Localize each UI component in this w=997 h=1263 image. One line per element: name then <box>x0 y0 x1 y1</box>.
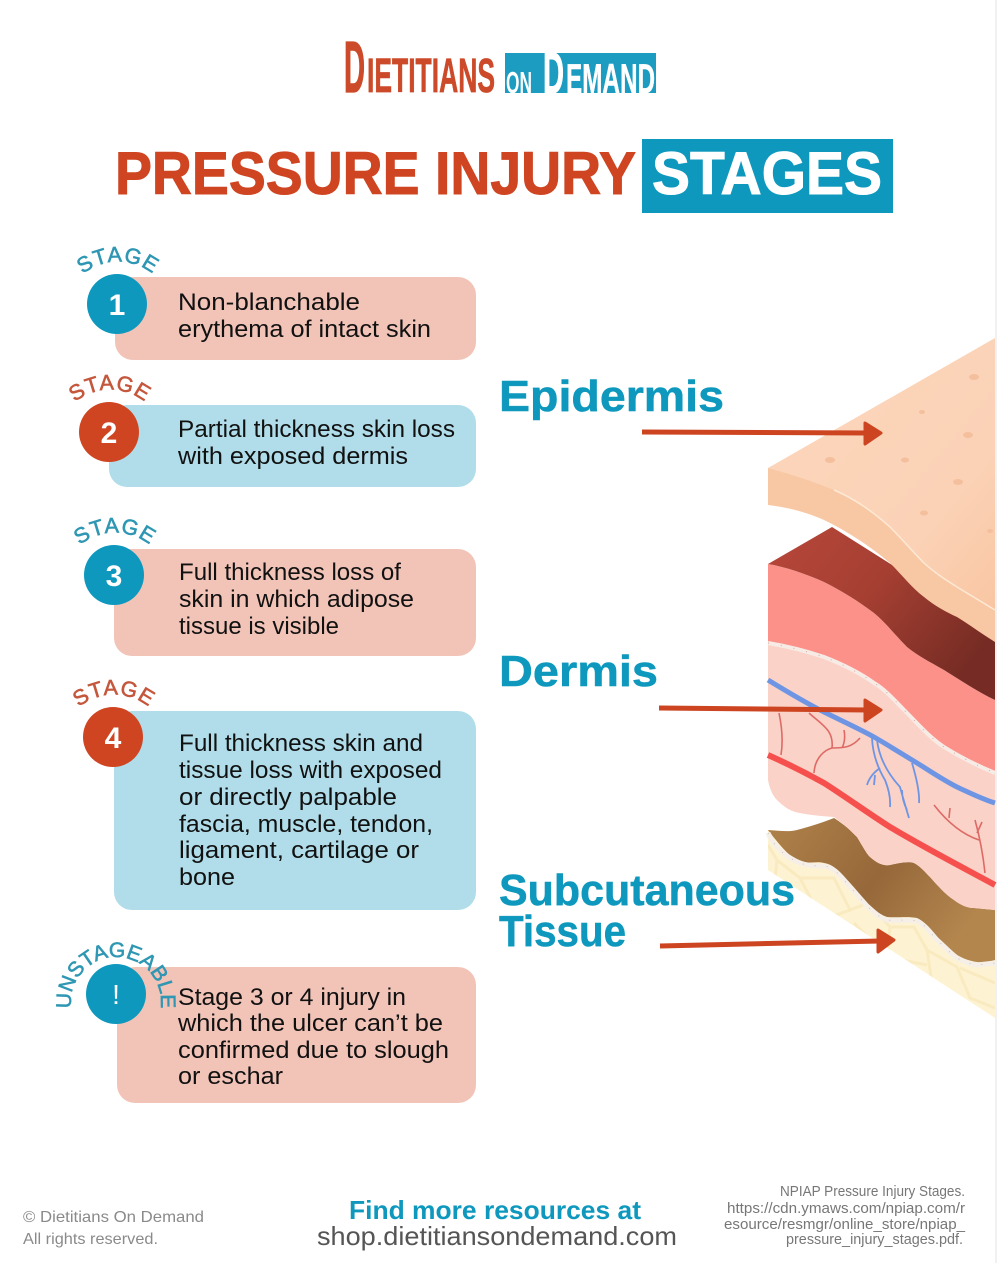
arrow: to subcutaneous tissue <box>660 930 894 952</box>
arrow: to epidermis <box>642 423 881 444</box>
dark red layer top <box>768 527 995 700</box>
panel: stage 4: ligament, cartilage or <box>179 837 419 864</box>
red capillaries <box>779 713 985 873</box>
source citation: pressure_injury_stages.pdf. <box>786 1232 963 1248</box>
stage 1 badge <box>87 274 147 334</box>
panel: stage 3 <box>74 518 476 656</box>
panel: unstageable: or eschar <box>178 1063 283 1090</box>
panel: stage 2: 2 <box>101 417 117 450</box>
title: PRESSURE INJURY <box>115 140 636 207</box>
panel: unstageable: ! <box>112 979 120 1010</box>
unstageable badge <box>86 964 146 1024</box>
copyright: © Dietitians On Demand <box>23 1209 204 1226</box>
copyright: All rights reserved. <box>23 1231 158 1248</box>
panel: stage 4: STAGE <box>73 680 156 706</box>
stage 2 badge <box>79 402 139 462</box>
footer call to action: shop.dietitiansondemand.com <box>317 1221 677 1251</box>
panel: stage 1: Non-blanchable <box>178 289 360 316</box>
panel: stage 1 <box>77 246 476 360</box>
panel: stage 4 <box>73 680 476 910</box>
panel: unstageable: confirmed due to slough <box>178 1037 449 1064</box>
panel: stage 3: skin in which adipose <box>179 586 414 613</box>
logo: Dietitians On Demand: D <box>344 28 365 108</box>
logo: Dietitians On Demand <box>346 41 656 93</box>
copyright <box>23 1209 204 1248</box>
panel: stage 4: fascia, muscle, tendon, <box>179 811 433 838</box>
label: Epidermis: Epidermis <box>499 372 724 421</box>
brown layer <box>768 818 995 962</box>
footer call to action: Find more resources at <box>349 1195 641 1225</box>
label: Subcutaneous Tissue: Tissue <box>499 907 626 956</box>
stage 4 badge <box>83 707 143 767</box>
source citation: NPIAP Pressure Injury Stages. <box>780 1184 965 1200</box>
panel: stage 2: STAGE <box>69 374 152 402</box>
panel: stage 4: tissue loss with exposed <box>179 757 442 784</box>
source citation <box>724 1184 966 1248</box>
fat layer <box>768 830 995 1018</box>
epidermis side <box>768 468 995 642</box>
vein <box>768 680 995 803</box>
logo: Dietitians On Demand: ON <box>506 65 532 100</box>
panel: unstageable: Stage 3 or 4 injury in <box>178 984 406 1011</box>
label: Subcutaneous Tissue: Subcutaneous <box>499 866 795 915</box>
logo: Dietitians On Demand: D <box>543 41 564 106</box>
panel: stage 4: bone <box>179 864 235 891</box>
panel: stage 1: 1 <box>109 289 125 322</box>
blue capillaries <box>867 738 919 818</box>
footer call to action <box>317 1195 677 1251</box>
dermis layer <box>768 643 995 910</box>
panel: stage 1: erythema of intact skin <box>178 316 431 343</box>
pink upper dermis <box>768 564 995 773</box>
panel: stage 4: 4 <box>105 722 122 755</box>
panel: stage 2: with exposed dermis <box>177 443 408 470</box>
panel: stage 4: Full thickness skin and <box>179 730 423 757</box>
panel: stage 3: tissue is visible <box>179 613 339 640</box>
panel: unstageable: which the ulcer can’t be <box>177 1010 443 1037</box>
source citation: esource/resmgr/online_store/npiap_ <box>724 1217 966 1233</box>
white dotted membrane of fat <box>768 833 995 965</box>
panel: stage 4: or directly palpable <box>179 784 397 811</box>
skin pores <box>825 374 993 533</box>
stage 3 badge <box>84 545 144 605</box>
title: STAGES <box>652 140 882 207</box>
source citation: https://cdn.ymaws.com/npiap.com/r <box>727 1201 965 1217</box>
panel: stage 3: 3 <box>106 560 122 593</box>
epidermis top face <box>768 338 995 610</box>
logo: Dietitians On Demand: IETITIANS <box>367 50 495 103</box>
panel: stage 1: STAGE <box>77 246 160 274</box>
panel: stage 3: STAGE <box>74 518 157 544</box>
panel: unstageable: UNSTAGEABLE <box>56 942 176 1008</box>
label: Dermis: Dermis <box>499 647 658 696</box>
panel: unstageable <box>56 942 476 1103</box>
label: Subcutaneous Tissue <box>499 866 795 956</box>
artery <box>768 755 995 885</box>
arrow: to dermis <box>659 700 881 721</box>
white membrane of dermis <box>768 643 995 773</box>
title <box>115 139 893 213</box>
logo: Dietitians On Demand: EMAND <box>566 55 655 102</box>
panel: stage 2: Partial thickness skin loss <box>178 416 455 443</box>
panel: stage 3: Full thickness loss of <box>179 559 401 586</box>
panel: stage 2 <box>69 374 476 487</box>
skin layers illustration <box>768 338 995 1018</box>
